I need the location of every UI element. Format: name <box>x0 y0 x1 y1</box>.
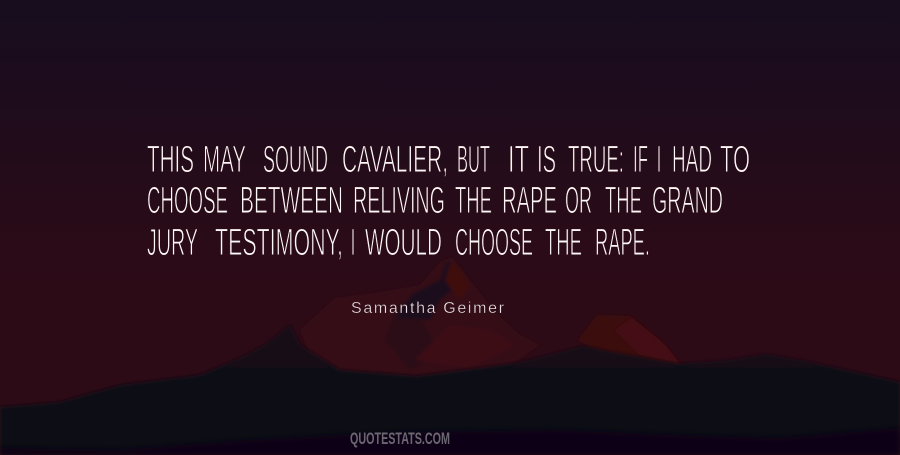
quote text: TRUE: <box>568 138 624 180</box>
quote text: IF <box>633 138 648 180</box>
quote text: TO <box>720 138 750 180</box>
quote text: HAD <box>672 138 712 180</box>
quote text: BUT <box>457 138 490 180</box>
author name: Samantha Geimer <box>351 300 505 317</box>
quote text: CHOOSE <box>455 221 533 263</box>
quote text: THE <box>545 221 582 263</box>
quote text: CAVALIER, <box>342 138 448 180</box>
quote text: IT <box>508 138 529 180</box>
quote text: THE <box>605 179 642 221</box>
quote text: THIS <box>147 138 194 180</box>
quote text: RELIVING <box>353 179 445 221</box>
quote text: I <box>657 138 661 180</box>
quote text: THE <box>455 179 492 221</box>
watermark: QUOTESTATS.COM <box>350 429 450 448</box>
quote text: MAY <box>203 138 246 180</box>
quote text: JURY <box>147 221 198 263</box>
quote text: IS <box>537 138 556 180</box>
second peak <box>578 315 682 366</box>
foreground ridge <box>0 325 900 455</box>
quote text: GRAND <box>652 179 723 221</box>
quote text: CHOOSE <box>147 179 228 221</box>
quote text: WOULD <box>365 221 442 263</box>
quote text <box>147 138 750 263</box>
quote text: RAPE <box>502 179 557 221</box>
quote text: TESTIMONY, <box>215 221 343 263</box>
near ridge <box>0 428 900 455</box>
central mountain <box>300 257 540 385</box>
quote text: BETWEEN <box>240 179 343 221</box>
quote text: SOUND <box>263 138 328 180</box>
quote text: RAPE. <box>595 221 650 263</box>
quote text: I <box>351 221 355 263</box>
quote text: OR <box>565 179 592 221</box>
